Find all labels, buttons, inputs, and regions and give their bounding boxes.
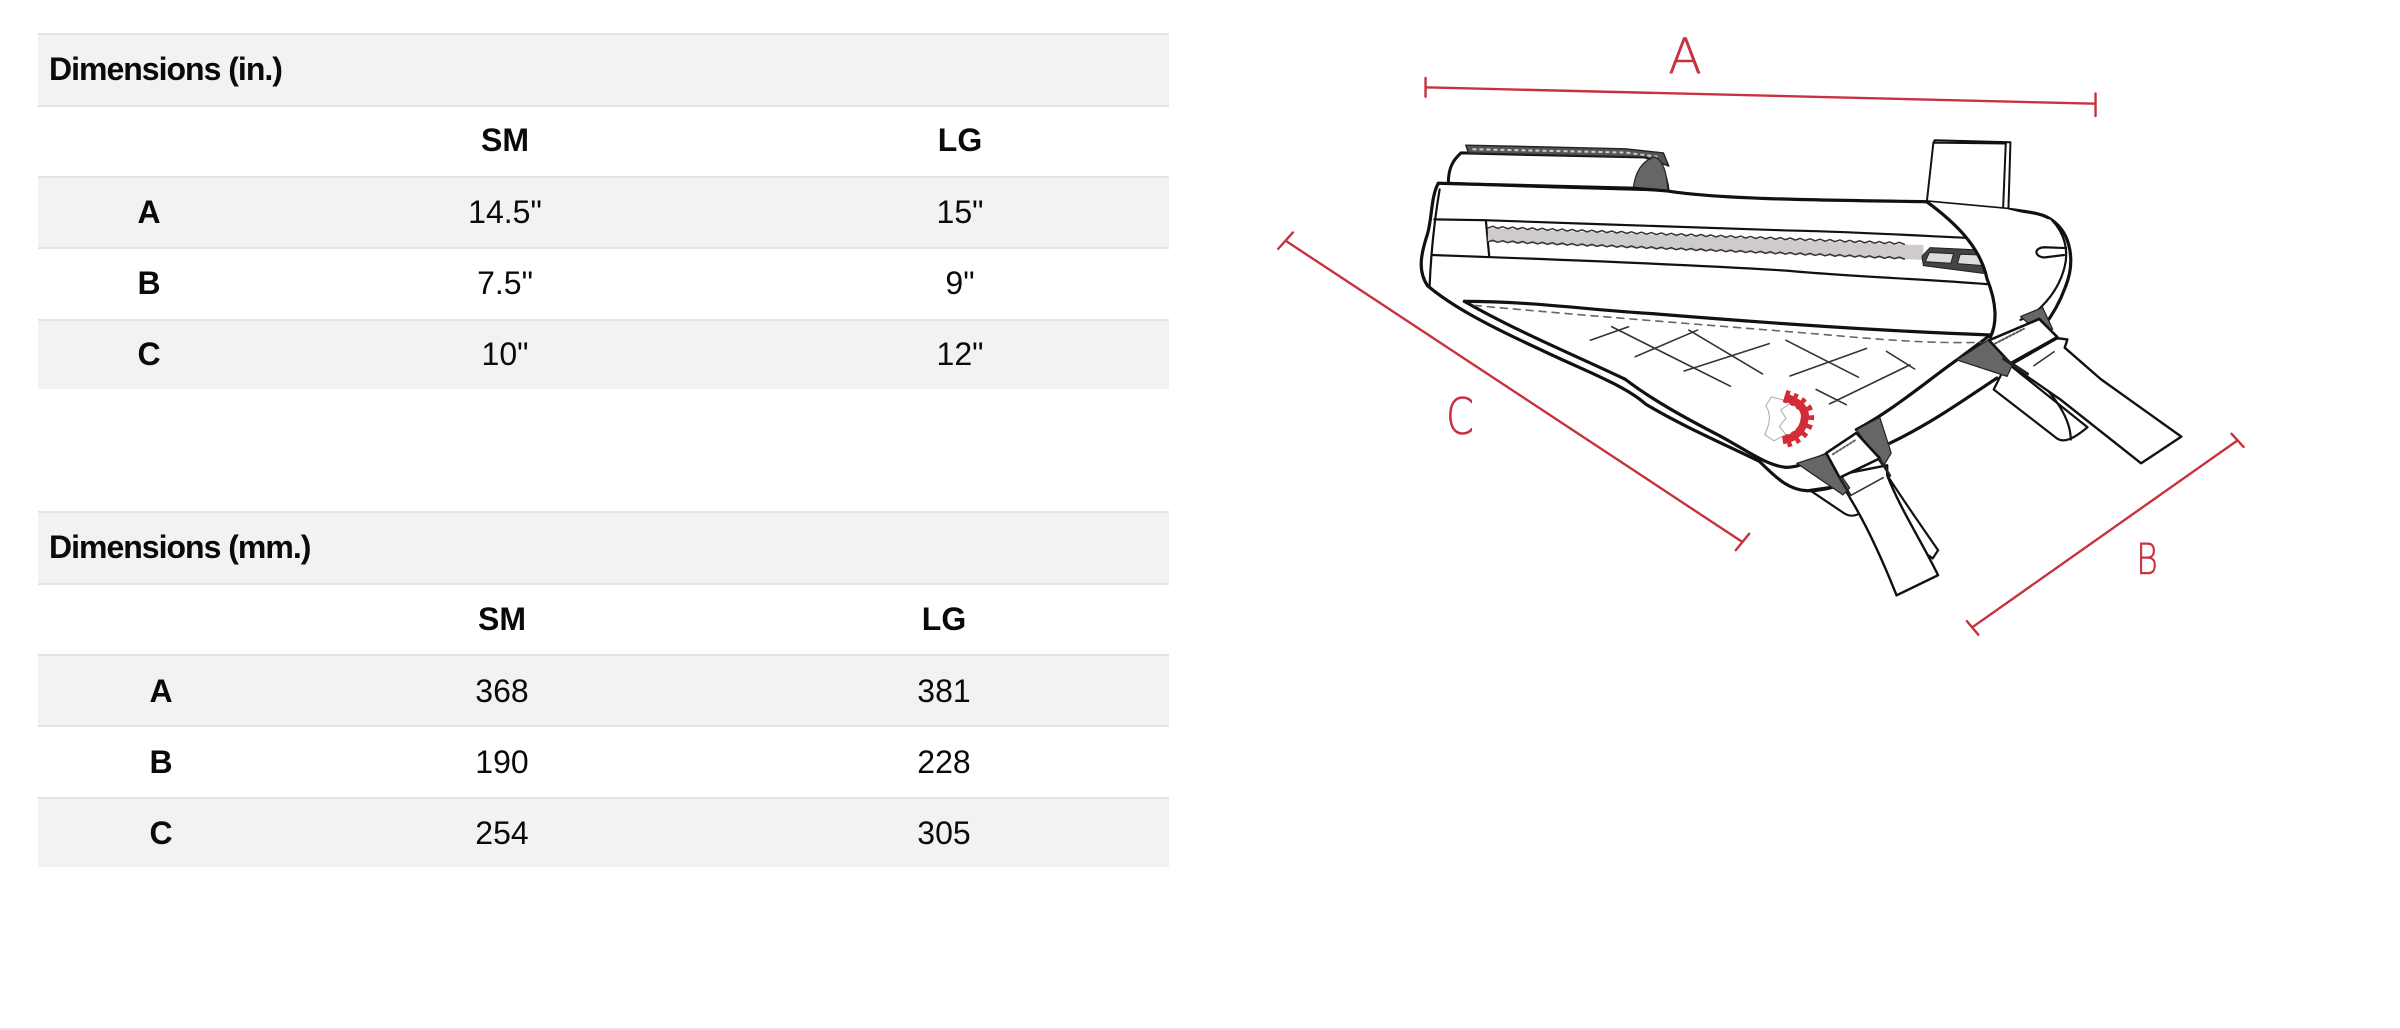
label B: B <box>2136 535 2158 585</box>
heading row: Dimensions (in.) <box>38 33 1169 105</box>
zipper panel <box>1432 219 1987 284</box>
size header row <box>38 105 1169 177</box>
size header row: LG <box>938 122 982 158</box>
lower mounting strap <box>1809 465 1938 595</box>
table: dimensions in inches <box>38 33 1169 389</box>
row A <box>38 176 1169 248</box>
row B: B <box>137 265 161 301</box>
row C: C <box>149 814 173 850</box>
table: dimensions in millimetres <box>38 511 1169 867</box>
row C: 10" <box>482 336 528 372</box>
dimension line B <box>1967 434 2244 635</box>
row A <box>38 654 1169 726</box>
page bottom rule <box>0 1028 2400 1030</box>
row B: 190 <box>475 744 529 780</box>
label C: C <box>1446 388 1474 446</box>
size header row <box>38 583 1169 655</box>
row B: 9" <box>945 265 975 301</box>
mounting tabs and buckles <box>1797 308 2057 495</box>
row A: A <box>149 672 173 708</box>
row C: C <box>137 336 161 372</box>
row A: 381 <box>917 672 971 708</box>
row B: 7.5" <box>477 265 533 301</box>
right tab strap <box>1927 140 2010 209</box>
row C <box>38 319 1169 389</box>
bag body <box>1421 183 2071 491</box>
dimension labels <box>1446 28 2158 585</box>
rear mounting strap <box>1994 338 2181 463</box>
row C: 254 <box>475 814 529 850</box>
row B: B <box>149 744 173 780</box>
top velcro strap <box>1448 145 1669 191</box>
right flap <box>1927 202 2066 337</box>
line drawing of bag and dimension lines <box>1278 78 2244 635</box>
size header row: LG <box>922 601 966 637</box>
zipper pull <box>1922 248 1987 274</box>
heading row: Dimensions (mm.): Dimensions (mm.) <box>49 529 310 565</box>
row C: 305 <box>917 814 971 850</box>
row C: 12" <box>937 336 983 372</box>
size header row: SM <box>478 601 526 637</box>
heading row: Dimensions (mm.) <box>38 511 1169 583</box>
brand logo: leather hide and red gear <box>1765 396 1808 442</box>
label A: A <box>1668 28 1702 85</box>
row A: 368 <box>475 672 529 708</box>
row C <box>38 797 1169 867</box>
dimension line C <box>1278 232 1749 550</box>
size header row: SM <box>481 122 529 158</box>
heading row: Dimensions (in.): Dimensions (in.) <box>49 51 282 87</box>
quilted stitching <box>1474 305 1980 405</box>
row A: 14.5" <box>468 194 542 230</box>
dimension line A <box>1426 78 2096 116</box>
row A: 15" <box>937 194 983 230</box>
row B <box>38 247 1169 319</box>
row A: A <box>137 194 161 230</box>
row B <box>38 725 1169 797</box>
row B: 228 <box>917 744 971 780</box>
zipper teeth band <box>1488 228 1923 260</box>
